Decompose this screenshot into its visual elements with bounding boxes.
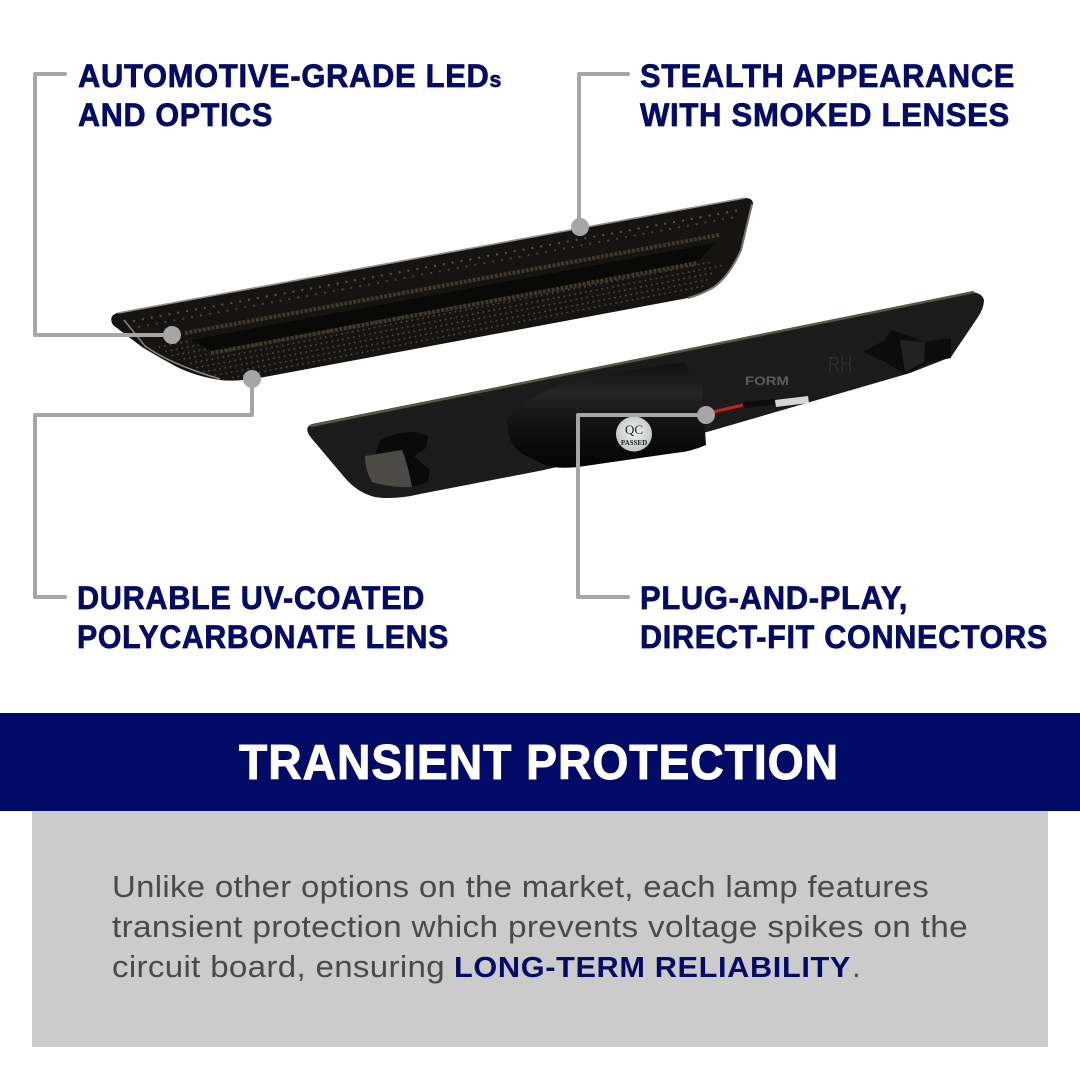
wire connector	[713, 396, 809, 412]
heading: stealth appearance	[640, 58, 1015, 133]
clip: left	[365, 432, 430, 487]
heading: plug-and-play: DIRECT-FIT CONNECTORS	[640, 619, 1048, 655]
heading: stealth appearance: WITH SMOKED LENSES	[640, 97, 1010, 133]
lamp: rear housing	[307, 292, 984, 498]
heading: durable lens	[77, 580, 449, 655]
heading: plug-and-play: PLUG-AND-PLAY,	[640, 580, 908, 616]
leader: connectors	[578, 406, 715, 597]
heading: stealth appearance: STEALTH APPEARANCE	[640, 58, 1015, 94]
QC sticker: QC	[625, 422, 643, 437]
body text: LONG-TERM RELIABILITY	[454, 952, 851, 984]
heading: LEDs and optics: AND OPTICS	[78, 97, 273, 133]
heading: LEDs and optics	[78, 58, 502, 133]
housing bulge	[507, 362, 706, 468]
QC sticker: PASSED	[621, 439, 647, 447]
heading: durable lens: POLYCARBONATE LENS	[77, 619, 449, 655]
body text: .	[852, 949, 861, 984]
panel: description background	[32, 811, 1048, 1047]
banner	[0, 713, 1080, 811]
heading: LEDs and optics: AUTOMOTIVE-GRADE LEDs	[78, 58, 502, 94]
clip: right	[863, 330, 951, 374]
body text: transient protection which prevents voltage spikes on the	[112, 909, 968, 944]
embossed RH: RH	[828, 354, 852, 376]
embossed FORM: FORM	[745, 374, 789, 388]
heading: plug-and-play	[640, 580, 1048, 655]
leader: smoked lenses	[571, 74, 628, 236]
QC sticker	[616, 416, 652, 452]
lamp: smoked lens front	[111, 198, 753, 381]
leader: LEDs	[35, 74, 181, 344]
leader: polycarbonate lens	[35, 370, 261, 597]
heading: durable lens: DURABLE UV-COATED	[77, 580, 425, 616]
body text: circuit board, ensuring	[112, 949, 445, 984]
banner title: TRANSIENT PROTECTION	[239, 736, 839, 790]
body text: Unlike other options on the market, each lamp features	[112, 869, 929, 904]
body text	[112, 869, 968, 984]
